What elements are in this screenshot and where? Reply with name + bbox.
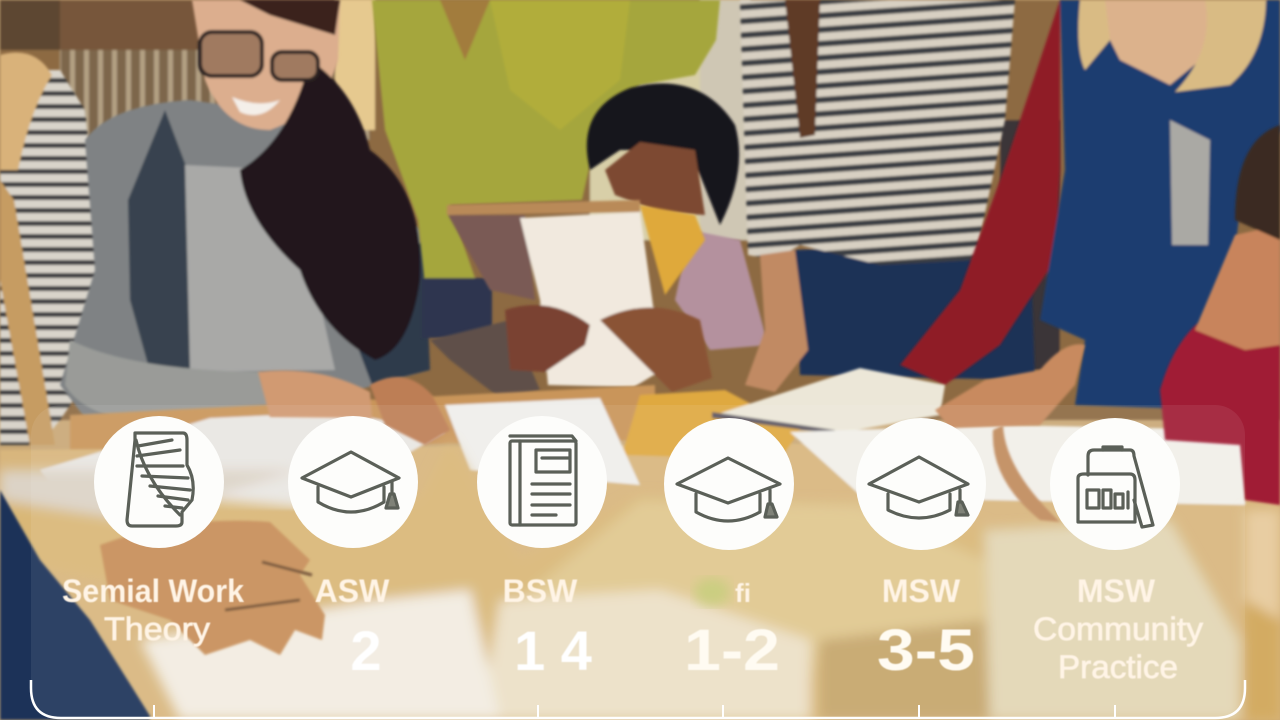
- column: Social Work Theory: [62, 416, 244, 647]
- table foreground: blurred cream and gold shapes: [0, 440, 1280, 720]
- icon circle: clipboard with chart: [1050, 418, 1180, 550]
- label: ASW: ASW: [315, 573, 390, 609]
- label: Semial Work Theory: Theory: [104, 611, 210, 647]
- icon circle: phone with DNA: [94, 416, 224, 548]
- label: MSW: MSW: [882, 573, 961, 609]
- book held by child: [430, 200, 712, 398]
- label: MSW Community Practice: [1033, 573, 1203, 685]
- person: right in blue cardigan and red sleeve: [900, 0, 1280, 410]
- person: yellow-green sweater: [372, 0, 720, 338]
- icon circle: graduation cap: [856, 418, 986, 550]
- icon circle: graduation cap: [288, 416, 418, 548]
- value: 3-5: 3-5: [877, 618, 975, 683]
- column: MSW Community Practice: [1033, 418, 1203, 685]
- value: 1-2: 1-2: [684, 618, 780, 683]
- table and papers: [0, 368, 1280, 720]
- icon circle: graduation cap: [664, 418, 794, 550]
- label: Semial Work Theory: [62, 573, 244, 647]
- column: fourth degree: [664, 418, 794, 683]
- person: bottom right with red sweater: [1160, 125, 1280, 505]
- background: bookshelf: [0, 0, 1280, 420]
- value: 1 4: 1 4: [514, 619, 592, 682]
- label: MSW Community Practice: Practice: [1058, 649, 1178, 685]
- person: child reading book: [587, 84, 768, 350]
- label: Semial Work Theory: Semial Work: [62, 573, 244, 609]
- label: blurred: fi: [735, 578, 751, 608]
- person: striped top and jeans: [740, 0, 1035, 392]
- label: BSW: BSW: [503, 573, 578, 609]
- column: ASW: [288, 416, 418, 682]
- column: MSW 3-5: [856, 418, 986, 683]
- decorative glow next to label: [694, 578, 730, 606]
- person: woman with glasses: [60, 0, 430, 420]
- foreground sleeve: [0, 490, 150, 720]
- panel: translucent rounded card: [31, 405, 1245, 718]
- column: BSW: [477, 416, 607, 682]
- label: MSW Community Practice: MSW: [1077, 573, 1156, 609]
- hands resting on the table: [258, 344, 1085, 445]
- label: MSW Community Practice: Community: [1033, 611, 1203, 647]
- skin strip on the table edge: [993, 425, 1060, 522]
- person: far left in striped shirt: [0, 52, 115, 445]
- foreground hand: [100, 521, 325, 655]
- value: 2: 2: [350, 619, 382, 682]
- icon circle: document: [477, 416, 607, 548]
